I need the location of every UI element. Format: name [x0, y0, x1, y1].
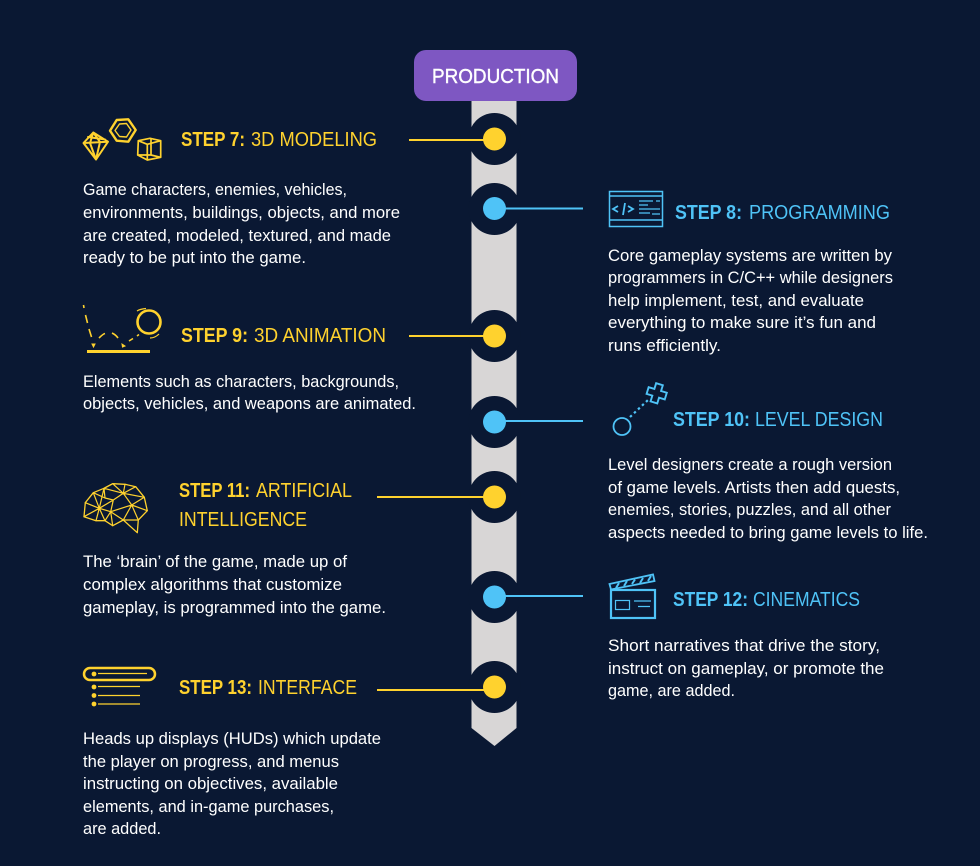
step 11 connector and node	[377, 486, 506, 508]
step 8 connector and node	[483, 197, 583, 220]
step 8 heading: PROGRAMMING	[749, 202, 890, 224]
step 8 heading: STEP 8:	[675, 202, 742, 224]
step 10 text: aspects needed to bring game levels to life.	[608, 524, 928, 542]
timeline arrow bar	[468, 95, 520, 746]
step 13 text: instructing on objectives, available	[83, 775, 338, 793]
step 8 text: Core gameplay systems are written by	[608, 247, 893, 265]
step 13 text: Heads up displays (HUDs) which update	[83, 730, 381, 748]
step 12 heading: CINEMATICS	[753, 589, 860, 611]
icon: code window	[609, 192, 663, 226]
step 9 heading: 3D ANIMATION	[254, 325, 386, 347]
step 13 heading	[179, 677, 357, 699]
step 13 text: are added.	[83, 820, 161, 838]
step 13 text	[83, 730, 381, 838]
step 10 text: Level designers create a rough version	[608, 456, 892, 474]
icon: clapperboard	[610, 574, 655, 618]
step 7 text: are created, modeled, textured, and made	[83, 227, 391, 245]
step 13 connector and node	[377, 676, 506, 698]
step 10 text	[608, 456, 928, 542]
step 7 text: ready to be put into the game.	[83, 249, 306, 267]
step 11 heading: STEP 11:	[179, 480, 250, 502]
icon: level path	[614, 381, 669, 435]
step 8 text: help implement, test, and evaluate	[608, 292, 864, 310]
step 7 connector and node	[409, 128, 506, 150]
step 12 text	[608, 637, 884, 700]
step 8 heading	[675, 202, 890, 224]
step 7 text: Game characters, enemies, vehicles,	[83, 181, 347, 199]
step 8 text: programmers in C/C++ while designers	[608, 269, 893, 287]
step 7 heading: STEP 7:	[181, 129, 245, 151]
step 11 text: gameplay, is programmed into the game.	[83, 599, 386, 617]
step 10 heading: LEVEL DESIGN	[755, 409, 883, 431]
step 7 heading	[181, 129, 377, 151]
production heading pill: PRODUCTION	[432, 66, 559, 88]
step 11 text	[83, 553, 386, 617]
icon: interface menu	[84, 668, 155, 706]
step 7 heading: 3D MODELING	[251, 129, 377, 151]
production heading pill	[414, 50, 577, 101]
step 13 heading: INTERFACE	[258, 677, 357, 699]
step 12 text: Short narratives that drive the story,	[608, 637, 880, 655]
step 12 text: instruct on gameplay, or promote the	[608, 660, 884, 678]
step 13 text: elements, and in-game purchases,	[83, 798, 334, 816]
step 10 text: enemies, stories, puzzles, and all other	[608, 501, 891, 519]
step 9 heading	[181, 325, 386, 347]
step 8 text	[608, 247, 893, 355]
step 12 heading	[673, 589, 860, 611]
icon: bouncing ball	[84, 305, 160, 353]
step 13 heading: STEP 13:	[179, 677, 252, 699]
step 10 heading	[673, 409, 883, 431]
step 9 text: Elements such as characters, backgrounds,	[83, 373, 399, 391]
step 8 text: runs efficiently.	[608, 337, 721, 355]
step 10 connector and node	[483, 410, 583, 434]
step 8 text: everything to make sure it’s fun and	[608, 314, 876, 332]
step 10 heading: STEP 10:	[673, 409, 750, 431]
step 9 heading: STEP 9:	[181, 325, 248, 347]
step 12 connector and node	[483, 586, 583, 608]
step 10 text: of game levels. Artists then add quests,	[608, 479, 900, 497]
step 12 heading: STEP 12:	[673, 589, 748, 611]
step 11 heading: ARTIFICIAL	[256, 480, 352, 502]
icon: neural brain	[84, 484, 147, 533]
step 7 text: environments, buildings, objects, and more	[83, 204, 400, 222]
step 11 heading	[179, 480, 352, 531]
step 11 heading: INTELLIGENCE	[179, 509, 307, 531]
step 9 text	[83, 373, 416, 413]
step 9 connector and node	[409, 324, 506, 348]
icon: 3D shapes	[84, 119, 161, 160]
step 13 text: the player on progress, and menus	[83, 753, 339, 771]
step 9 text: objects, vehicles, and weapons are animated.	[83, 395, 416, 413]
step 11 text: The ‘brain’ of the game, made up of	[83, 553, 347, 571]
step 7 text	[83, 181, 400, 267]
step 12 text: game, are added.	[608, 682, 735, 700]
step 11 text: complex algorithms that customize	[83, 576, 342, 594]
